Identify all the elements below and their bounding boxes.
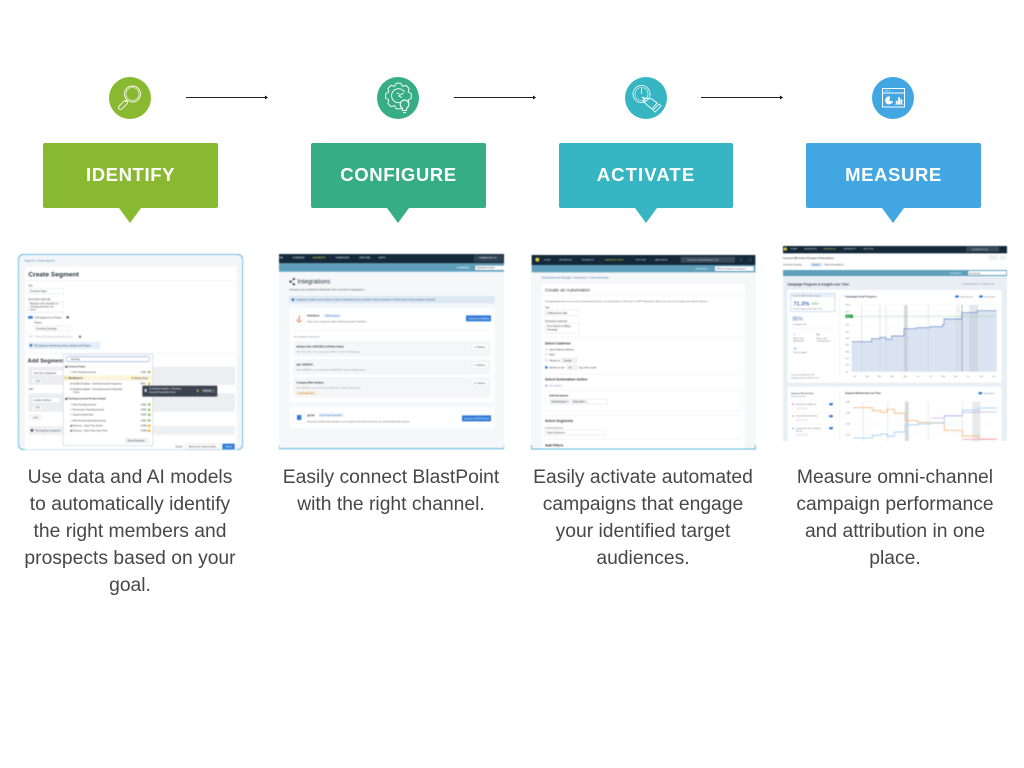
automation form: Sunday (564, 360, 572, 362)
panel: integrations screenshot (278, 253, 505, 450)
kpi column: Filters used (793, 337, 804, 340)
line chart: segment membership over time: 1,280 (845, 401, 850, 403)
campaign title and tabs: Overview Settings (783, 264, 803, 267)
panel: create segment screenshot: Members who should be on (30, 303, 59, 306)
heading: identify: IDENTIFY (86, 164, 175, 185)
automation form: Select Segments... (547, 432, 567, 435)
field search dropdown: 9.95% (141, 431, 147, 433)
breadcrumb: Checking Account Campaign > Automations > Create Automation (542, 277, 610, 280)
card: hubspot: ••• Options (474, 364, 486, 367)
navigation bar: hiatus-hiccough@blastpoint.com (687, 259, 719, 262)
card: hubspot: Hub: 20538719 • Last connected on 2025/02/12 • Used in 3 Automations (296, 368, 366, 371)
navigation bar: MAPS (379, 256, 386, 259)
line chart: segment membership over time (845, 392, 997, 441)
automation form: Daily (549, 354, 555, 356)
automation form: Description (optional) (545, 320, 567, 323)
card: sftp: SFTP (307, 414, 315, 418)
line chart: campaign goal progress: 10% (846, 365, 850, 367)
field search dropdown: AI Enabled Insights - Checking Account Propensity (70, 388, 123, 391)
campaign title and tabs: Insights (812, 264, 821, 267)
panel: create segment screenshot: This Segment inherits the privacy settings of its Project (34, 344, 91, 347)
line chart: campaign goal progress: Jan (853, 376, 856, 378)
text: measure description: place. (869, 548, 921, 569)
automation form: Total Recipient × (551, 401, 569, 404)
field search dropdown: ▣ Checking Account Product Details (65, 398, 107, 401)
field search dropdown: Score (73, 391, 80, 394)
panel: create segment screenshot: Submit and Create Another (188, 446, 217, 449)
automation form: Campaign (547, 329, 558, 331)
automation form: day of the month (579, 366, 597, 369)
kpi column: Goal: 85% FPBR / 10.84% in Program (793, 296, 821, 298)
card: hubspot: ••• Options (474, 346, 486, 349)
segment membership list: Eastside Hills and 1M Pay (796, 415, 817, 418)
line chart: campaign goal progress: Show Goal Line (960, 296, 973, 298)
panel: campaign progress screenshot (782, 245, 1008, 442)
line chart: campaign goal progress: Mar (878, 376, 882, 378)
add segment heading: Add Segment B (28, 358, 70, 364)
navigation bar (279, 254, 504, 263)
navigation bar: ME (280, 257, 284, 259)
automation form: Direct Mail for E-Billing (547, 325, 571, 328)
automation form: 1st (568, 366, 572, 369)
panel: create segment screenshot (17, 253, 244, 451)
kpi column: 25 (816, 333, 820, 337)
panel: create segment screenshot: Description (optional) (28, 298, 51, 301)
line chart: campaign goal progress: Show Events (984, 295, 995, 298)
field search dropdown: ▣ Common Fields (65, 365, 86, 368)
card: hubspot: HubSpot (307, 314, 320, 318)
filter bar: Customers (core) (477, 267, 495, 270)
kpi column: Campaign Date (816, 339, 831, 342)
arrow: configure to activate (454, 96, 536, 100)
line chart: campaign goal progress: 50% (846, 338, 850, 340)
kpi column (791, 293, 840, 379)
kpi column: Campaign Goal (793, 324, 807, 326)
navigation bar: CAMPAIGNS BETA (604, 259, 624, 262)
automation form: Upon Audience Refresh (549, 349, 575, 352)
panel: create segment screenshot: Location Attribute (33, 399, 52, 402)
field search dropdown: ✓ Has Checking Account (70, 371, 96, 374)
card: sftp: Connect to SFTP Server (464, 417, 490, 420)
filter bar (532, 265, 755, 272)
line chart: campaign goal progress: 30% (846, 351, 850, 353)
line chart: segment membership over time: Segment Membership over Time (845, 392, 882, 395)
automation form: Select Segments (545, 419, 573, 423)
text: measure description: campaign performance (796, 494, 994, 515)
line chart: campaign goal progress: 0% (846, 371, 849, 373)
text: activate description: audiences. (596, 548, 690, 569)
panel: create segment screenshot: Checking Target (30, 290, 47, 293)
line chart: campaign goal progress: Feb (866, 376, 869, 378)
icon: analytics dashboard window (872, 77, 914, 119)
card: hubspot: HubSpot Hub: 291510310 (v1/Public Name) (296, 345, 344, 348)
card: hubspot: Company-Wide HubSpot (296, 381, 324, 384)
campaign title and tabs (783, 255, 1006, 267)
text: activate description (533, 467, 753, 569)
text: identify description: Use data and AI models (28, 467, 232, 488)
line chart: campaign goal progress: 100% (846, 305, 851, 307)
panel: create segment screenshot: Title (28, 285, 33, 288)
field search dropdown: Close Dropdown (127, 439, 145, 442)
info banner (289, 296, 495, 303)
automation form: Create an Automation (545, 288, 590, 293)
panel: create segment screenshot: + OR (34, 408, 40, 410)
line chart: campaign goal progress: 90% (846, 311, 850, 313)
panel: create segment screenshot: Segments > Create Segment (25, 259, 55, 262)
automation form: Campaign Automations ensure users in designated funnel cycle, proactively deliver to CDP export / to SFTP destinations. Help set out users to our Program (for audience Refresh) (545, 300, 707, 303)
field search dropdown: ✓ Has Checking Account (70, 403, 96, 406)
dark tooltip: Account Propensity Score (149, 391, 176, 394)
campaign title and tabs: Improve Bill Assist Program Participation (783, 256, 834, 260)
segment membership list: Segment Membership (791, 392, 814, 395)
card: hubspot: CRM Integration (325, 315, 340, 318)
heading: configure: CONFIGURE (340, 164, 457, 185)
filter bar: AUDIENCE: (950, 272, 962, 275)
filter bar: FPECU Residential Customers (716, 268, 746, 271)
dark tooltip (142, 386, 217, 397)
text: identify description: to automatically identify (30, 494, 230, 515)
line chart: campaign goal progress: Jun (916, 376, 919, 378)
arrow: identify to configure (186, 96, 268, 100)
panel: create segment screenshot: Share this Segment with other users (35, 336, 73, 339)
panel: create segment screenshot: Project (34, 321, 42, 324)
line chart: campaign goal progress: 60% (846, 331, 850, 333)
card: hubspot: Hub: 20538719 (296, 364, 313, 366)
navigation bar: AUDIENCES (804, 247, 817, 250)
field search dropdown: AI Enabled Insights - Checking Account Sequence (70, 383, 123, 386)
navigation bar: CAMPAIGNS (335, 256, 350, 259)
kpi column: Filters used (816, 337, 827, 340)
navigation bar: AUDIENCE (293, 256, 305, 259)
automation form: Monthly on the (549, 366, 565, 369)
filter bar (279, 263, 504, 272)
panel: create segment screenshot: + OR (34, 381, 40, 383)
line chart: campaign goal progress: Nov (980, 376, 983, 378)
screenshot title: Create Segment (28, 271, 80, 278)
panel: create segment screenshot: Checking Campaign (36, 328, 58, 330)
segment membership list: Eastside Hills FPBR Pay (796, 403, 816, 406)
dark tooltip: AI Enabled Insights - Checking (149, 388, 182, 391)
line chart: campaign goal progress: 85% (846, 316, 850, 318)
field search dropdown: ▣ Recency - Open Time Open Time (70, 430, 108, 433)
icon: magnifying glass (109, 77, 151, 119)
line chart: campaign goal progress: May (904, 376, 907, 378)
navigation bar: SEGMENTS (582, 260, 594, 262)
card: sftp: Data Transfer Integration (320, 414, 342, 417)
text: activate description: campaigns that engage (543, 494, 743, 515)
line chart: campaign goal progress: Jul (929, 376, 932, 378)
field search dropdown: 100% (141, 410, 147, 412)
navigation bar: MAPS BETA (655, 259, 668, 262)
icon: gear with light bulb (377, 77, 419, 119)
field search dropdown: 85% (141, 384, 145, 386)
automation form: Select Automation Action (545, 378, 587, 382)
heading: activate (559, 143, 733, 223)
navigation bar: CAMPAIGNS (823, 247, 836, 250)
panel: create segment screenshot: + AND (32, 416, 39, 419)
filter bar: AUDIENCE: (457, 266, 470, 269)
text: measure description: and attribution in one (805, 521, 985, 542)
line chart: campaign goal progress: Oct (967, 375, 970, 378)
navigation bar (532, 255, 755, 265)
kpi column: 85% (793, 317, 803, 323)
kpi column: 10 (793, 346, 797, 350)
filter bar: AUDIENCE: (696, 268, 708, 271)
card: hubspot: Sync your customer data effortlessly with HubSpot. (307, 320, 367, 324)
heading: activate: ACTIVATE (597, 164, 695, 185)
line chart: campaign goal progress: Apr (891, 375, 894, 378)
panel: create segment screenshot: checking accounts, but (30, 306, 54, 309)
navigation bar: EXPLORE (359, 257, 371, 259)
heading: identify (43, 143, 218, 223)
line chart: campaign goal progress: 70% (846, 325, 850, 327)
kpi column: 7 (793, 333, 795, 337)
card: hubspot: Your HubSpot Connections (294, 336, 320, 339)
card: sftp (290, 407, 495, 428)
panel: create segment screenshot: aren't (30, 309, 36, 312)
field search dropdown: Ranked Such (134, 378, 149, 380)
info banner: Integrations enable secure delivery of data to third-party service providers. Data is protected in transit using strong encryption protocols. (296, 299, 436, 302)
field search dropdown: ✓ Has Personal Checking Account (70, 419, 106, 422)
field search dropdown: ✓ Has Account Opening Account (70, 409, 104, 412)
segment membership list: Account (796, 430, 803, 433)
line chart: segment membership over time: Show Events (984, 392, 994, 395)
card: hubspot (290, 308, 495, 402)
kpi column: +5.3% (812, 303, 818, 305)
navigation bar: HOME (544, 260, 551, 262)
line chart: campaign goal progress: Campaign Goal Progress (845, 295, 877, 299)
text: configure description: Easily connect BlastPoint (283, 467, 499, 488)
automation form: Delay Mail × (573, 401, 586, 404)
panel: create segment screenshot: AND (28, 388, 34, 391)
field search dropdown: 100% (141, 420, 147, 422)
navigation bar: retail@email.com (972, 248, 989, 251)
text: configure description: with the right channel. (297, 494, 485, 515)
field search dropdown (63, 354, 153, 446)
line chart: campaign goal progress (845, 295, 997, 378)
panel: create segment screenshot: Has Client Safeguard (34, 372, 57, 375)
text: identify description: prospects based on your (24, 548, 236, 569)
automation form: Add Filters (545, 444, 563, 448)
line chart: campaign goal progress: 20% (846, 358, 850, 360)
card: hubspot: Hub: 19876543 • Last connected on 2025/01/30 • Used in 0 Automations (296, 386, 361, 389)
section heading: ◯ Campaign KPI ◯ Campaign CTR (962, 283, 995, 286)
automation form: Send Email (549, 386, 562, 388)
card: sftp: Securely transfer files between your system and external servers by automating data exports. (307, 420, 411, 423)
text: activate description: your identified target (556, 521, 730, 542)
automation form: Included Segments (545, 427, 563, 430)
section heading (787, 282, 995, 286)
navigation bar: SEGMENTS (313, 257, 326, 259)
navigation bar: retail@email.com (479, 257, 497, 260)
campaign title and tabs: Tasks Automations (824, 264, 844, 267)
field search dropdown: ▣ Recency - Open Time Sector (70, 425, 103, 428)
text: identify description (24, 467, 236, 596)
segment membership list: as of current month (791, 395, 805, 398)
card: hubspot: ⚠ Needs Attention (298, 392, 314, 395)
field search dropdown: 100% (141, 404, 147, 406)
card: hubspot: Connect to HubSpot (468, 317, 490, 320)
automation form: Title (545, 307, 550, 310)
text: activate description: Easily activate automated (533, 467, 753, 488)
text: configure description (283, 467, 500, 515)
icon: hand pressing power button (625, 77, 667, 119)
card: hubspot: Hub: 291510310 • Last connected 2025/08/02 • Used in 20 Automations (296, 351, 360, 354)
field search dropdown: 100% (141, 415, 147, 417)
navigation bar: EXPLORE (636, 260, 646, 262)
heading: measure (806, 143, 981, 223)
kpi column: 71.3% (793, 302, 809, 308)
text: identify description: the right members and (34, 521, 226, 542)
integrations heading: Connect your workflows effortlessly with our built-in integrations. (289, 287, 365, 291)
kpi column: Current Progress (Q4 2024-YTD) (793, 307, 822, 310)
panel: create segment screenshot: This Segment contains 5 (35, 429, 61, 432)
automation form: Weekly on (549, 360, 561, 362)
kpi column: Campaign started on 2024-01-17 UTC (791, 376, 820, 379)
panel: create automation screenshot (530, 254, 757, 450)
text: measure description (796, 467, 994, 569)
panel: create segment screenshot: Cancel (175, 447, 183, 449)
field search dropdown: 9.95% (141, 426, 147, 428)
line chart: campaign goal progress: Dec (992, 376, 995, 378)
field search dropdown: ✓ Issued a Debit Card (70, 414, 94, 417)
automation form: Add Recipients (549, 394, 569, 398)
arrow: activate to measure (701, 96, 783, 100)
field search dropdown: checking (71, 359, 81, 361)
line chart: campaign goal progress: Aug (942, 375, 945, 378)
integrations heading (289, 278, 365, 291)
panel: create segment screenshot: Add Segment to a Project (35, 316, 62, 319)
dark tooltip: Reveal (203, 391, 211, 393)
integrations heading: Integrations (297, 279, 330, 286)
automation form (542, 284, 745, 450)
navigation bar: AUDIENCES (559, 259, 572, 262)
kpi column: Automations (793, 339, 804, 342)
kpi column: Events Logged (793, 351, 807, 354)
filter bar: Residential (970, 272, 981, 275)
section heading: Campaign Progress & Insights over Time (787, 282, 849, 286)
navigation bar: SEGMENTS (844, 248, 856, 250)
heading: measure: MEASURE (845, 164, 942, 185)
navigation bar: HOME (791, 248, 798, 250)
automation form: E-Billing Direct Mail (547, 312, 568, 315)
filter bar (783, 270, 1007, 276)
panel: create segment screenshot: Submit (225, 446, 233, 449)
line chart: campaign goal progress: 40% (846, 345, 850, 347)
line chart: segment membership over time: 1,220 (845, 435, 850, 437)
segment membership list (791, 390, 840, 441)
kpi column: Last refresh on 2025-02-17 UTC (791, 373, 816, 376)
segment membership list: Eastside Hills and 1st Monthly (796, 427, 820, 430)
line chart: campaign goal progress: Sep (954, 376, 957, 378)
navigation bar: EXPLORE (863, 248, 874, 250)
field search dropdown: BlastRank AI (68, 377, 83, 380)
automation form: Select Cadence (545, 342, 571, 346)
line chart: segment membership over time: 1,240 (845, 424, 850, 426)
line chart: segment membership over time: 1,260 (845, 412, 850, 414)
field search dropdown: 100% (141, 372, 147, 374)
card: hubspot: ••• Options (474, 382, 486, 385)
navigation bar (783, 246, 1007, 253)
text: measure description: Measure omni-channel (797, 467, 993, 488)
text: identify description: goal. (109, 575, 151, 596)
heading: configure (311, 143, 486, 223)
